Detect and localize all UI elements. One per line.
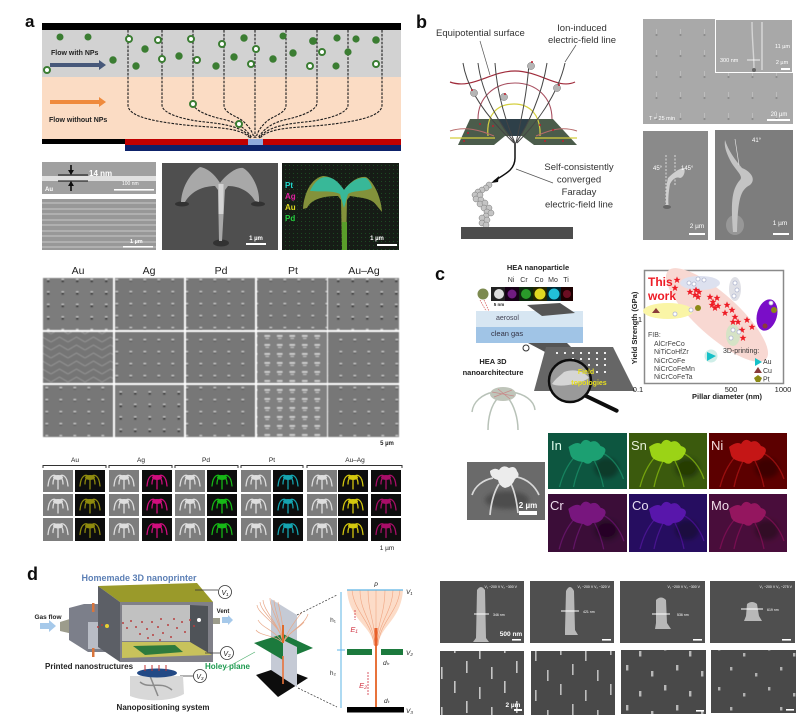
flow with NPs label: Flow with NPs [51, 50, 99, 57]
pillar 3: 536 nm [677, 613, 689, 617]
array 1 [440, 651, 524, 715]
charged nanoparticles [44, 36, 379, 127]
printer chamber [69, 583, 220, 662]
panel a: EDS gallery [43, 457, 402, 552]
cross-section with field lines: h₂ [330, 670, 337, 677]
pillar 1: V₁ −200 V V₂ −300 V [484, 585, 518, 589]
EDS map: Pt Ag Au Pd: Ag [285, 192, 296, 201]
This work label: This [648, 275, 673, 289]
FIB legend: NiCrCoFeMn [654, 366, 695, 373]
printed helix of particles [472, 182, 494, 228]
aerosol and clean gas bands [476, 303, 583, 353]
panel a: SEM arrays by metal [43, 265, 399, 447]
annotation: Faraday line: Faraday [562, 187, 597, 198]
EDS map: Pt Ag Au Pd [282, 163, 399, 250]
SEM: bent nanowire [715, 130, 793, 240]
voltage symbols: V₃ [196, 674, 204, 681]
Cr map: Cr [550, 498, 564, 513]
HEA 3D nanoarchitecture heading: HEA 3D [479, 357, 507, 366]
schematic: flow chamber [42, 23, 401, 151]
EDS map grid [548, 433, 787, 552]
column headings: Au–Ag [348, 265, 380, 277]
gallery structures [48, 475, 396, 538]
element labels: Mo [548, 277, 558, 284]
panel b: ion-induced field [416, 12, 793, 240]
nanopositioning stage [130, 665, 184, 700]
substrate [461, 227, 573, 239]
substrate with magnifier: Field [578, 369, 594, 376]
pillar 1: 500 nm [500, 631, 522, 638]
inset: 300 nm [720, 58, 739, 64]
SEM: mask cross-section: Au [45, 187, 53, 193]
cross-section with field lines: E₂ [359, 681, 367, 690]
pillar 3 [620, 581, 705, 643]
FIB legend: NiTiCoHfZr [654, 349, 689, 356]
annotation: equipotential surface: Equipotential surface [436, 28, 525, 39]
pillar 1: 346 nm [493, 613, 505, 617]
SEM: nanohelix array: 20 µm [771, 112, 787, 118]
EDS map: Pt Ag Au Pd: 1 µm [370, 236, 384, 242]
Sn map: Sn [631, 438, 647, 453]
aerosol and clean gas bands: aerosol [496, 315, 519, 322]
star data [672, 276, 756, 341]
SEM: kinked structure: 2 µm [690, 223, 704, 230]
annotation: Faraday line: electric-field line [545, 200, 613, 210]
scale label 5 µm: 5 µm [380, 441, 394, 447]
axis labels: 500 [725, 385, 737, 394]
diagram: field convergence [450, 41, 577, 183]
SEM: bent nanowire: 41° [752, 138, 762, 144]
inset: 11 µm [775, 44, 790, 50]
HEA nanoparticle heading: HEA nanoparticle [507, 263, 569, 272]
pillar 2 [530, 581, 614, 643]
array 3 [621, 650, 706, 714]
annotation: ion-induced line: electric-field line [548, 35, 616, 46]
printed architecture sketch [472, 387, 535, 430]
nanoparticle maps [478, 287, 573, 318]
cross-section with field lines: V₁ [406, 589, 412, 596]
annotation: ion-induced line: Ion-induced [557, 23, 607, 34]
arrow: flow with NPs [50, 60, 106, 70]
pillar 3: V₁ −200 V V₂ −300 V [667, 585, 701, 589]
gallery cell backgrounds [43, 470, 401, 541]
cross-section with field lines: V₂ [406, 650, 413, 657]
voltage symbols: V₁ [222, 590, 229, 597]
axis labels: Pillar diameter (nm) [692, 392, 763, 401]
Mo map: Mo [711, 498, 729, 513]
gallery headings: Pt [269, 457, 275, 464]
gallery headings: Ag [137, 457, 145, 464]
SEM: mask cross-section: 14 nm [89, 169, 112, 178]
inset [716, 20, 792, 72]
SEM: nanohelix array [643, 19, 793, 124]
column headings [72, 265, 380, 277]
label b: b [416, 12, 427, 32]
Mo map [709, 494, 787, 552]
cross-section with field lines [330, 583, 413, 715]
panel d: homemade nanoprinter [27, 564, 796, 715]
SEM: mask cross-section [42, 162, 156, 194]
FIB legend: FIB: [648, 332, 661, 339]
flow without NPs label: Flow without NPs [49, 117, 107, 124]
nanoparticle maps: 5 nm [494, 302, 504, 307]
pillar 4 [710, 581, 795, 643]
array 2 [531, 651, 615, 715]
Cr map [548, 494, 627, 552]
SEM: HEA structure [467, 462, 545, 520]
cross-section with field lines: E₁ [350, 625, 358, 634]
FIB legend [648, 332, 695, 381]
SEM: kinked structure [643, 131, 708, 240]
EDS map: Pt Ag Au Pd: Pt [285, 181, 293, 190]
scale label 1 µm: 1 µm [380, 545, 394, 552]
Ni map: Ni [711, 438, 723, 453]
gallery headings: Pd [202, 457, 210, 464]
cross-section with field lines: V₃ [406, 708, 413, 715]
3D-printing legend: 3D-printing: [723, 348, 759, 355]
Sn map [629, 433, 707, 489]
label: nanopositioning system: Nanopositioning system [117, 703, 209, 712]
voltage labels [180, 586, 234, 682]
axis labels: 1 [638, 315, 642, 324]
gallery headings: Au–Ag [345, 457, 365, 464]
column headings: Au [72, 265, 85, 277]
yield strength plot [630, 255, 791, 401]
3D-printing legend: Au [763, 359, 772, 366]
SEM tile grid [43, 278, 399, 437]
EDS map: Pt Ag Au Pd: Au [285, 203, 296, 212]
SEM: pillar arrays [440, 650, 796, 715]
nanoparticles [56, 32, 380, 70]
markers [652, 277, 777, 362]
SEM: printed tripod structure [162, 163, 278, 250]
label d: d [27, 564, 38, 584]
cross-section with field lines: h₁ [330, 617, 337, 624]
EDS map: Pt Ag Au Pd: Pd [285, 214, 295, 223]
column headings: Pt [288, 265, 298, 277]
annotation: Faraday line: Self-consistently [544, 162, 614, 173]
pillar 2: 421 nm [583, 610, 595, 614]
SEM: HEA structure: 2 µm [519, 501, 537, 510]
substrate with magnifier [534, 347, 635, 411]
gas inlet [34, 614, 73, 634]
vent [217, 609, 233, 625]
pillar 1 [440, 581, 524, 643]
aerosol and clean gas bands: clean gas [491, 329, 523, 338]
particle stream [97, 618, 195, 641]
FIB legend: NiCrCoFe [654, 358, 685, 365]
Ni map [709, 433, 787, 489]
SEM: kinked structure: 145° [681, 166, 694, 172]
3D-printing legend: Cu [763, 368, 772, 375]
inset: 2 µm [776, 60, 789, 66]
element labels: Ni [508, 277, 515, 284]
cross-section with field lines: P [374, 583, 378, 589]
SEM: bent nanowire: 1 µm [773, 220, 787, 227]
brackets [43, 466, 402, 468]
cross-section with field lines: dₕ [383, 660, 390, 667]
array 1: 2 µm [506, 702, 521, 709]
voltage symbols: V₂ [223, 651, 231, 658]
label c: c [435, 264, 445, 284]
pillar 4: V₁ −200 V V₂ −275 V [759, 585, 793, 589]
In map: In [551, 438, 562, 453]
SEM: kinked structure: 45° [653, 166, 663, 172]
SEM: mask cross-section: 100 nm [122, 181, 139, 187]
gallery headings [71, 457, 365, 464]
gallery headings: Au [71, 457, 79, 464]
label: printed nanostructures: Printed nanostructures [45, 662, 134, 671]
3D-printing legend [723, 348, 772, 384]
SEM: nanohelix array: T = 25 min [649, 116, 675, 122]
element labels: Ti [563, 277, 569, 284]
axis labels [630, 291, 791, 401]
pillar 2: V₁ −200 V V₂ −320 V [577, 585, 611, 589]
SEM: single pillars [440, 581, 795, 643]
substrate with magnifier: topologies [571, 380, 607, 387]
data regions [643, 255, 781, 375]
column headings: Ag [143, 265, 156, 277]
column headings: Pd [215, 265, 228, 277]
SEM: line grating [42, 199, 156, 250]
Co map: Co [632, 498, 649, 513]
label a: a [25, 12, 35, 31]
label: holey plane: Holey plane [205, 662, 250, 671]
vent: Vent [217, 609, 229, 615]
3D-printing legend: Pt [763, 376, 770, 384]
3D funnel schematic [226, 595, 337, 707]
SEM: printed tripod structure: 1 µm [249, 236, 263, 242]
voltage symbols [196, 590, 231, 681]
panel c: HEA nanoarchitecture [435, 255, 791, 552]
FIB legend: NiCrCoFeTa [654, 374, 693, 381]
title: homemade 3D nanoprinter: Homemade 3D nanoprinter [81, 573, 197, 583]
element labels: Co [535, 277, 544, 284]
In map [548, 433, 627, 489]
axis labels: Yield Strength (GPa) [630, 291, 639, 364]
axis labels: 1000 [775, 385, 791, 394]
FIB legend: AlCrFeCo [654, 341, 685, 348]
array 4 [711, 650, 796, 713]
pillar 4: 619 nm [767, 608, 779, 612]
This work label: work [647, 289, 676, 303]
element labels: Cr [520, 277, 528, 284]
SEM: line grating: 1 µm [130, 239, 143, 245]
gas inlet: Gas flow [34, 614, 62, 621]
element labels [508, 277, 569, 284]
cross-section with field lines: dₜ [384, 698, 390, 705]
panel a: flow printing [25, 12, 401, 250]
arrow: flow without NPs [50, 97, 106, 107]
HEA 3D nanoarchitecture heading: nanoarchitecture [463, 368, 523, 377]
annotation: Faraday line: converged [557, 174, 601, 186]
Co map [629, 494, 707, 552]
field lines [128, 30, 382, 138]
axis labels: 0.1 [633, 385, 643, 394]
